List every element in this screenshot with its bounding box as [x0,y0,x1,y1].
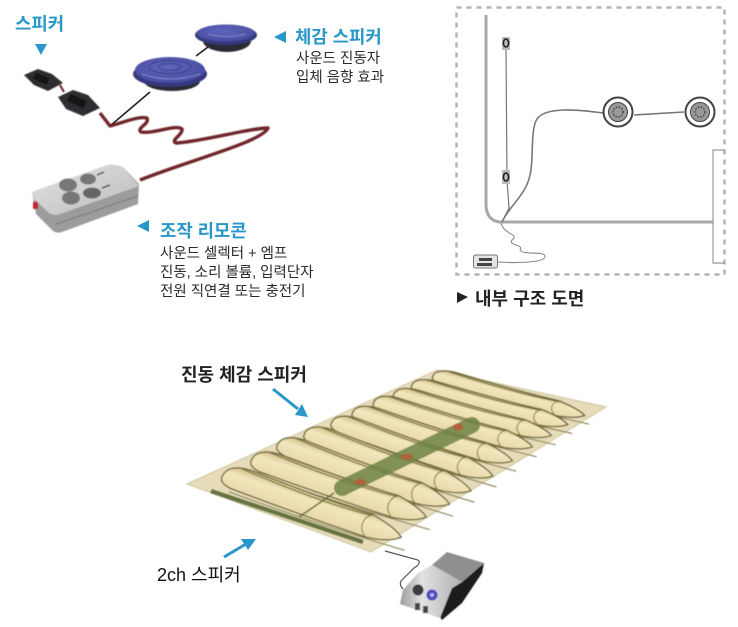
label: vibration speaker text [295,27,384,86]
panel: speaker mat [187,367,606,552]
wire: red twisted cable [100,113,268,180]
icon: stereo speakers [24,69,100,116]
label: remote text: 사운드 셀렉터 + 엠프 [160,245,287,262]
label: vibration speaker heading: 진동 체감 스피커 [181,365,307,385]
arrow: to 2ch speaker [224,539,256,557]
icon: large vibration speaker [133,57,207,91]
2ch speaker strip [211,491,363,542]
label: vibration speaker text: 체감 스피커 [295,27,382,47]
connector wire [299,493,334,517]
label: speaker heading: 스피커 [15,14,64,34]
arrow: speaker pointer [35,44,47,55]
label: vibration speaker text: 사운드 진동자 [296,50,380,67]
icon: top small speaker [502,37,510,50]
icon: speaker disc two [686,98,714,126]
green vibration strip [342,425,472,488]
arrow: diagram caption marker [457,292,468,303]
icon: lower small speaker [502,170,510,184]
panel: internal structure diagram [456,8,725,274]
icon: speaker disc one [604,98,632,126]
arrow: remote pointer [137,220,149,232]
icon: control box [400,552,484,620]
vibration points [354,424,463,485]
icon: remote control [32,165,139,233]
rolls [218,367,593,552]
arrow: vibration speaker pointer [274,31,286,43]
label: diagram caption: 내부 구조 도면 [475,289,584,309]
label: 2ch speaker heading: 2ch 스피커 [157,565,241,585]
wire: speaker line [502,48,509,222]
wire: control box cable [385,551,419,589]
mat base [187,370,606,552]
icon: wired remote [474,255,498,268]
label: remote text: 조작 리모콘 [160,221,247,241]
label: remote text: 진동, 소리 볼륨, 입력단자 [160,264,314,281]
label: vibration speaker text: 입체 음향 효과 [296,69,384,86]
arrow: to vibration speakers [273,389,308,417]
label: remote text [160,221,314,300]
label: remote text: 전원 직연결 또는 충전기 [160,283,306,300]
icon: small vibration speaker [195,24,257,52]
wire: black speaker cable [110,47,208,126]
wire: main cable [502,110,684,222]
wire: remote cable [498,223,545,262]
